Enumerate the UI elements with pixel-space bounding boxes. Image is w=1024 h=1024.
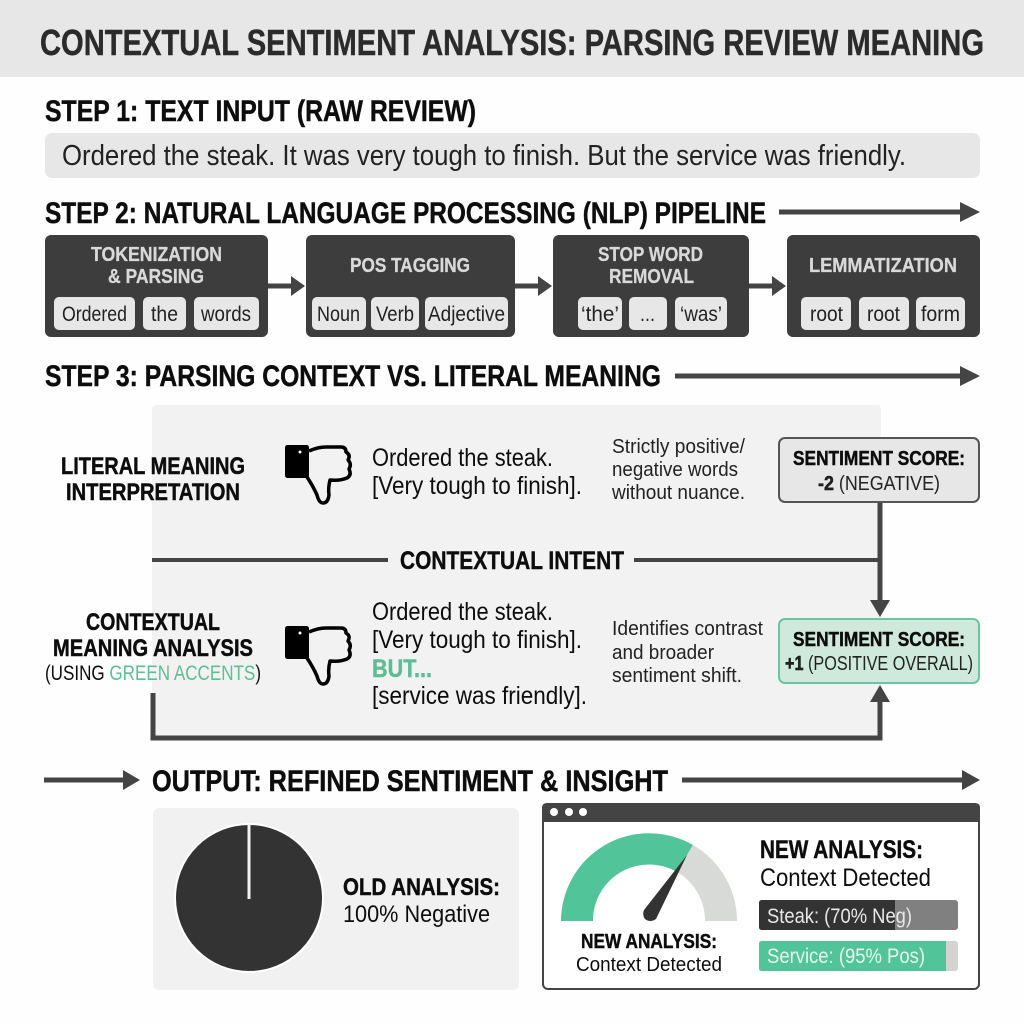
score box: contextual positive: +1 (POSITIVE OVERALL): [785, 653, 973, 675]
panel: parsing context background: [152, 405, 881, 738]
text: literal review reading: [Very tough to finish].: [372, 472, 582, 500]
panel: tokenization and parsing: the: [151, 303, 178, 326]
text: old analysis result: OLD ANALYSIS:: [343, 874, 500, 901]
text: new analysis heading: Context Detected: [760, 864, 931, 892]
score box: contextual positive: SENTIMENT SCORE:: [793, 629, 965, 651]
panel: tokenization and parsing: Ordered: [62, 303, 127, 326]
text: new analysis heading: [760, 836, 931, 892]
pie chart: 100 percent negative: [175, 824, 323, 972]
label: contextual meaning analysis: MEANING ANALYSIS: [53, 635, 253, 662]
arrow: stop word removal to lemmatization: [749, 276, 786, 296]
panel: stop word removal: STOP WORD: [598, 244, 703, 266]
output heading: OUTPUT: REFINED SENTIMENT & INSIGHT: [152, 765, 668, 798]
text: contextual review reading: BUT...: [372, 655, 432, 683]
divider: contextual intent: [152, 547, 880, 575]
label: literal meaning interpretation: LITERAL MEANING: [61, 453, 245, 480]
divider: contextual intent: CONTEXTUAL INTENT: [400, 547, 624, 575]
text: contextual review reading: [Very tough to finish].: [372, 626, 582, 654]
score box: literal negative: -2 (NEGATIVE): [818, 473, 940, 495]
score box: contextual positive: [779, 619, 979, 683]
arrow: step 3: [675, 366, 980, 386]
text: gauge caption: [576, 931, 722, 976]
label: literal meaning interpretation: INTERPRETATION: [66, 479, 240, 506]
text: contextual method note: and broader: [612, 642, 714, 664]
bar: service 95 percent positive: [759, 941, 958, 971]
score box: literal negative: [779, 438, 979, 502]
icon: thumbs down literal: [285, 445, 350, 503]
text: new analysis heading: NEW ANALYSIS:: [760, 836, 923, 864]
panel: POS tagging: POS TAGGING: [350, 255, 470, 277]
label: contextual meaning analysis: (USING GREEN ACCENTS): [45, 662, 261, 685]
text: old analysis result: [343, 874, 500, 928]
panel: POS tagging: Adjective: [428, 303, 505, 326]
panel: stop word removal: REMOVAL: [609, 266, 694, 288]
step 2 heading: STEP 2: NATURAL LANGUAGE PROCESSING (NLP) PIPELINE: [45, 197, 766, 230]
text: old analysis result: 100% Negative: [343, 901, 490, 928]
connector: negative score to contextual score: [870, 502, 890, 617]
arrow: step 2: [779, 202, 980, 222]
panel: tokenization and parsing: TOKENIZATION: [91, 244, 222, 266]
icon: thumbs down contextual: [285, 626, 350, 684]
text: literal method note: Strictly positive/: [612, 436, 745, 458]
text: contextual method note: Identifies contrast: [612, 618, 763, 640]
text: gauge caption: NEW ANALYSIS:: [581, 931, 717, 953]
browser title bar: [542, 803, 980, 822]
text: contextual method note: sentiment shift.: [612, 665, 742, 687]
panel: POS tagging: Verb: [376, 303, 414, 326]
text: gauge caption: Context Detected: [576, 954, 722, 976]
panel: stop word removal: [553, 235, 749, 337]
panel: tokenization and parsing: words: [200, 303, 251, 326]
bar: steak 70 percent negative: Steak: (70% Neg): [767, 905, 912, 928]
panel: old analysis: [153, 808, 519, 990]
step 3 heading: STEP 3: PARSING CONTEXT VS. LITERAL MEANING: [45, 360, 661, 393]
label: contextual meaning analysis: CONTEXTUAL: [86, 609, 220, 636]
panel: lemmatization: form: [921, 303, 960, 326]
panel: POS tagging: [306, 235, 515, 337]
text: contextual review reading: Ordered the steak.: [372, 598, 553, 626]
panel: lemmatization: root: [867, 303, 900, 326]
panel: lemmatization: root: [810, 303, 843, 326]
raw review text box: Ordered the steak. It was very tough to finish. But the service was friendly.: [62, 140, 906, 172]
panel: POS tagging: Noun: [317, 303, 360, 326]
text: contextual method note: [612, 618, 763, 687]
arrow: POS tagging to stop word removal: [515, 276, 552, 296]
text: literal review reading: [372, 444, 582, 500]
title banner: [0, 0, 1024, 77]
arrow: into output: [44, 770, 140, 790]
panel: tokenization and parsing: [45, 235, 268, 337]
panel: stop word removal: ‘was’: [680, 303, 722, 326]
score box: literal negative: SENTIMENT SCORE:: [793, 448, 965, 470]
step 1 heading: STEP 1: TEXT INPUT (RAW REVIEW): [45, 95, 476, 128]
connector: contextual loop into positive score: [150, 685, 890, 740]
panel: lemmatization: LEMMATIZATION: [809, 255, 957, 277]
panel: browser window new analysis: [542, 803, 980, 989]
bar: service 95 percent positive: Service: (95% Pos): [767, 945, 925, 968]
gauge chart: [561, 833, 737, 921]
label: literal meaning interpretation: [61, 453, 245, 506]
raw review text box: [45, 133, 980, 178]
text: contextual review reading: [372, 598, 587, 710]
text: literal method note: negative words: [612, 459, 738, 481]
panel: stop word removal: ‘the’: [581, 303, 619, 326]
panel: tokenization and parsing: & PARSING: [108, 266, 204, 288]
bar: steak 70 percent negative: [759, 900, 958, 930]
panel: lemmatization: [787, 235, 980, 337]
text: literal method note: without nuance.: [611, 482, 745, 504]
label: contextual meaning analysis: [45, 609, 261, 685]
text: contextual review reading: [service was friendly].: [372, 682, 587, 710]
arrow: from output: [682, 770, 980, 790]
text: literal review reading: Ordered the steak.: [372, 444, 553, 472]
arrow: tokenization to POS tagging: [268, 276, 305, 296]
panel: stop word removal: ...: [640, 303, 655, 326]
text: literal method note: [611, 436, 745, 504]
